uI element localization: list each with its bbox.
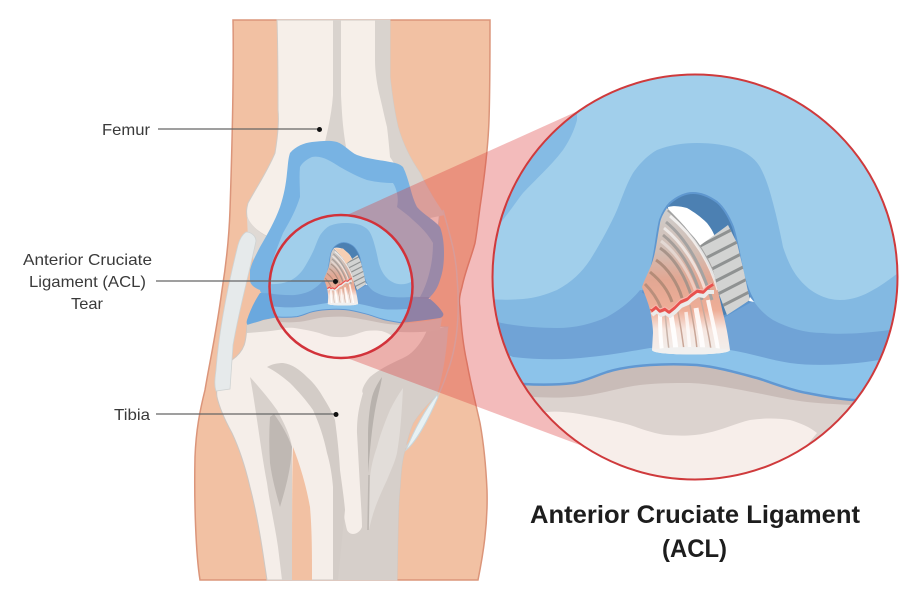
title — [530, 501, 861, 563]
label: ACL tear: Tear — [71, 296, 104, 313]
tibia and fibula bones — [217, 325, 448, 580]
leg skin — [195, 20, 490, 580]
label: ACL tear: Anterior Cruciate — [23, 252, 152, 269]
femur bone — [247, 20, 445, 300]
femoral cartilage: blue — [250, 141, 444, 310]
meniscus grey band under cartilage — [247, 314, 442, 333]
label: ACL tear — [23, 252, 338, 313]
zoom cone — [347, 92, 620, 460]
label: Femur: Femur — [102, 122, 151, 139]
tibial cartilage: blue — [247, 293, 443, 325]
label: Tibia: Tibia — [114, 407, 150, 424]
title: Anterior Cruciate Ligament — [530, 501, 861, 529]
label: ACL tear: Ligament (ACL) — [29, 274, 146, 291]
big circle ring — [492, 74, 898, 480]
big magnified circle — [494, 76, 896, 478]
peach patch in small arch — [334, 248, 352, 264]
label: Femur — [102, 122, 322, 139]
label: Tibia — [114, 407, 338, 424]
right ligament and tendon — [405, 210, 458, 450]
small circle inset — [270, 223, 412, 337]
small circle ring — [270, 215, 412, 358]
left patellar tendon — [215, 232, 256, 391]
title: (ACL) — [662, 535, 727, 563]
